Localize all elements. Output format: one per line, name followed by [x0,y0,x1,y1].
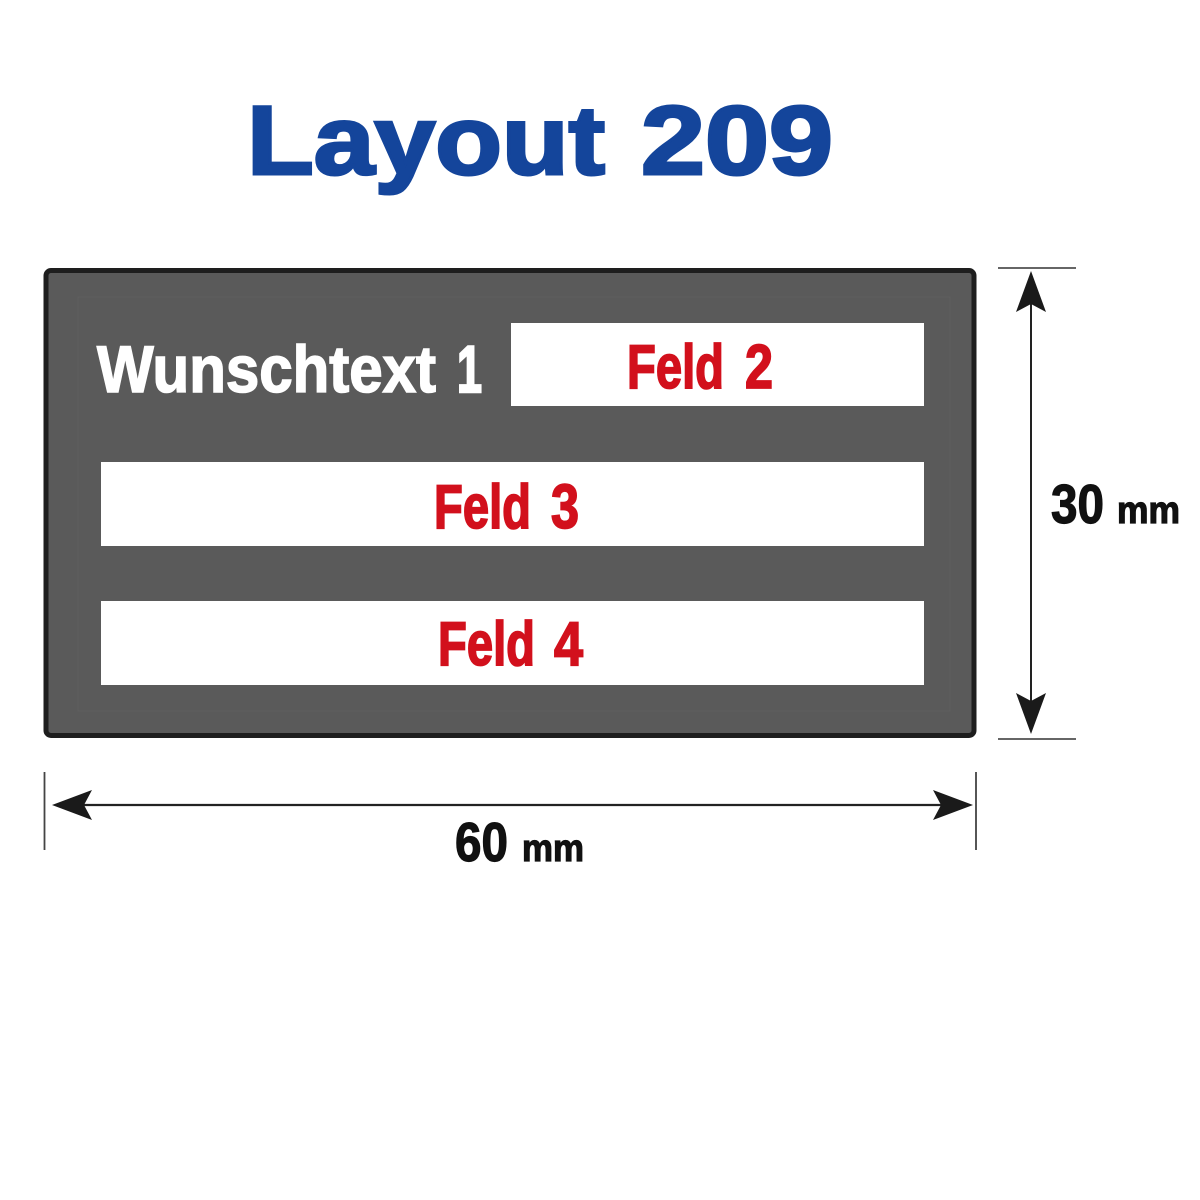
title: Layout [247,86,605,195]
field 4: 4 [554,610,583,679]
dimension: width arrow [44,772,976,850]
dimension: height arrow [998,268,1076,739]
field 3: Feld [434,473,531,542]
title: 209 [641,86,833,195]
dimension label: 30 mm [1051,473,1180,535]
dimension label: 60 mm: 60 [455,811,508,873]
field 4: Feld [438,610,535,679]
dimension label: 60 mm [455,811,584,873]
field 3 [101,462,924,546]
dimension label: 60 mm: mm [522,828,584,870]
field 3: 3 [551,473,579,542]
text: Wunschtext 1: 1 [457,332,482,406]
dimension label: 30 mm: mm [1117,490,1180,532]
field 4 [101,601,924,685]
dimension label: 30 mm: 30 [1051,473,1104,535]
panel: label plate [46,270,974,736]
text: Wunschtext 1: Wunschtext [97,332,436,406]
field 2: 2 [745,333,773,402]
field 2: Feld [627,333,724,402]
title [247,86,833,195]
field 2 [511,323,924,406]
